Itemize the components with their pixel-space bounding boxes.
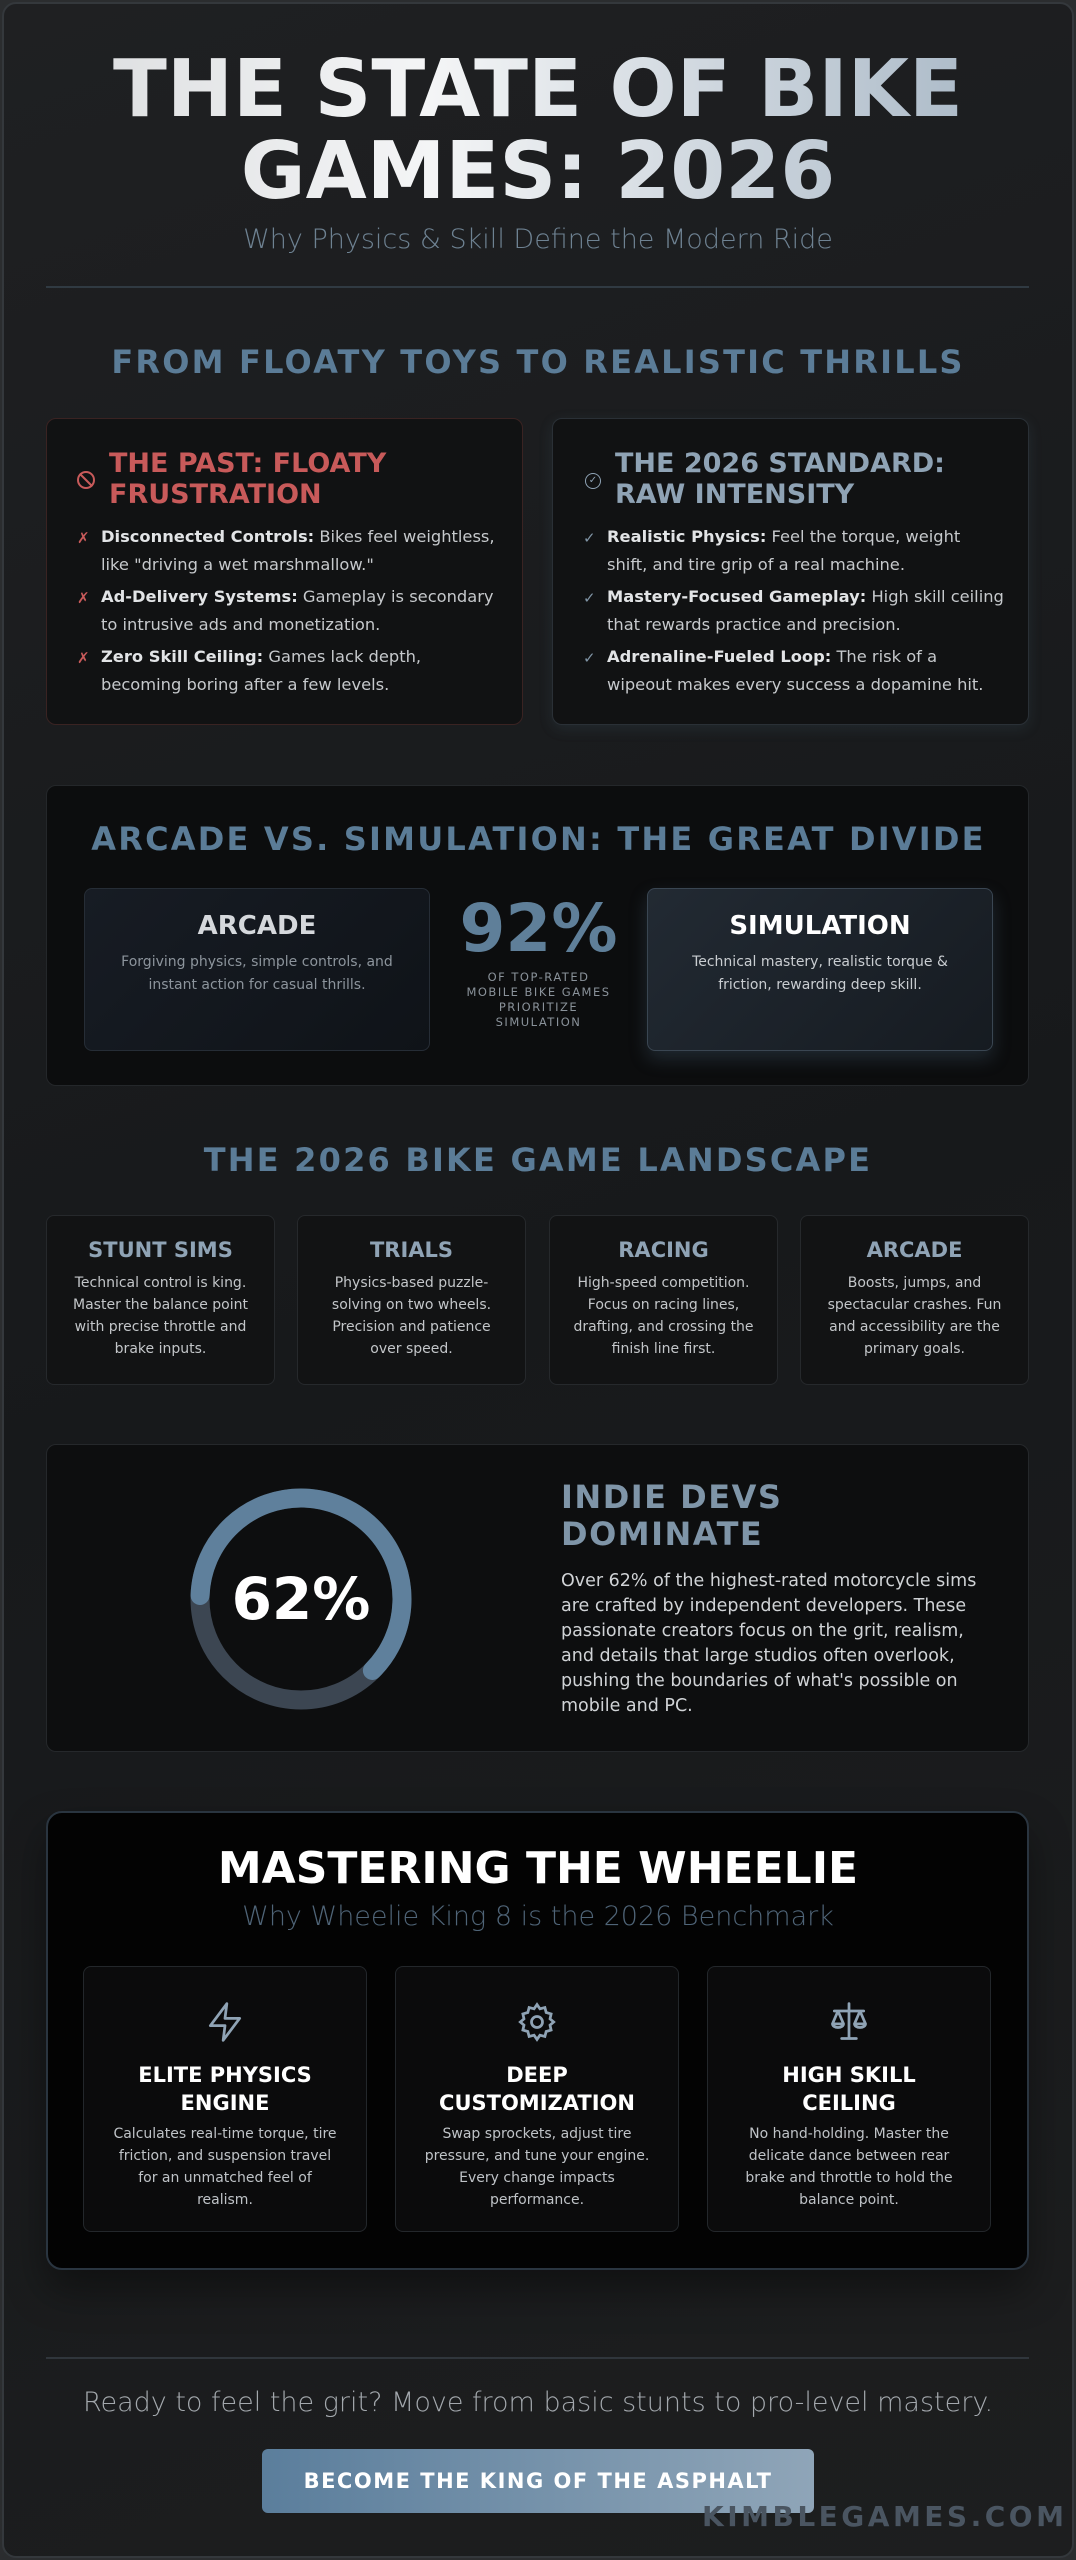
heading: landscape: THE 2026 BIKE GAME LANDSCAPE	[204, 1141, 872, 1179]
list: Ad-Delivery Systems: Gameplay is secondary	[101, 587, 494, 606]
list: becoming boring after a few levels.	[101, 675, 389, 694]
heading: MASTERING THE WHEELIE	[218, 1843, 858, 1894]
panel heading	[615, 448, 945, 510]
subheading: Why Wheelie King 8 is the 2026 Benchmark	[242, 1901, 834, 1932]
box: simulation	[647, 888, 993, 1051]
list: ✓	[583, 529, 596, 547]
box: arcade: Forgiving physics, simple controls, and instant action for casual thrills.	[121, 954, 393, 993]
card: stunt sims: STUNT SIMS	[88, 1238, 233, 1262]
list: Disconnected Controls: Bikes feel weightless,	[101, 527, 495, 546]
heading: ARCADE VS. SIMULATION: THE GREAT DIVIDE	[91, 820, 986, 858]
feature: deep customization: Swap sprockets, adjust tire	[443, 2126, 631, 2142]
feature: high skill ceiling: brake and throttle to hold the	[745, 2170, 953, 2186]
list: Adrenaline-Fueled Loop: The risk of a	[607, 647, 937, 666]
heading: INDIE DEVS	[561, 1478, 782, 1516]
feature: elite physics: friction, and suspension travel	[119, 2148, 331, 2164]
list: Mastery-Focused Gameplay: High skill ceiling	[607, 587, 1004, 606]
feature: deep customization: CUSTOMIZATION	[439, 2091, 635, 2115]
donut chart 62%: 62%	[232, 1565, 370, 1633]
heading	[561, 1478, 782, 1553]
title: GAMES: 2026	[241, 125, 835, 217]
panel: indie devs	[46, 1444, 1029, 1752]
box: simulation: SIMULATION	[729, 911, 911, 941]
card: trials: Physics-based puzzle-solving on two wheels. Precision and patience over speed.	[332, 1275, 491, 1357]
list: that rewards practice and precision.	[607, 615, 901, 634]
stat: 92%: SIMULATION	[496, 1015, 581, 1029]
list: Realistic Physics: Feel the torque, weight	[607, 527, 960, 546]
heading: from floaty toys: FROM FLOATY TOYS TO REALISTIC THRILLS	[111, 343, 965, 381]
icon: check circle	[585, 473, 601, 489]
panel heading: THE 2026 STANDARD:	[615, 448, 945, 479]
card: arcade: Boosts, jumps, and spectacular crashes. Fun and accessibility are the primary goals.	[828, 1275, 1001, 1357]
feature: deep customization: performance.	[490, 2192, 584, 2208]
stat: 92%: OF TOP-RATED	[488, 970, 589, 984]
feature: deep customization: pressure, and tune your engine.	[425, 2148, 649, 2164]
stat: 92%	[460, 890, 617, 1029]
card: stunt sims: Technical control is king. Master the balance point with precise throttle and brake inputs.	[73, 1275, 248, 1357]
feature: high skill ceiling: No hand-holding. Master the	[749, 2126, 949, 2142]
feature: elite physics: Calculates real-time torque, tire	[113, 2126, 337, 2142]
card: arcade: ARCADE	[867, 1238, 962, 1262]
feature: high skill ceiling: CEILING	[802, 2091, 896, 2115]
card: trials	[297, 1215, 526, 1385]
icon: check circle: ✓	[589, 475, 597, 486]
feature: high skill ceiling: HIGH SKILL	[782, 2063, 916, 2087]
watermark: KIMBLEGAMES.COM	[702, 2500, 1067, 2533]
button: BECOME THE KING OF THE ASPHALT	[304, 2469, 772, 2493]
feature: deep customization: Every change impacts	[459, 2170, 615, 2186]
panel heading	[109, 448, 386, 510]
feature: deep customization	[395, 1966, 679, 2232]
list: ✗	[77, 589, 90, 607]
list: shift, and tire grip of a real machine.	[607, 555, 905, 574]
stat: 92%: MOBILE BIKE GAMES	[466, 985, 611, 999]
panel: mastering the wheelie	[46, 1811, 1029, 2270]
icon: gear	[518, 2002, 556, 2042]
panel: arcade vs simulation	[46, 785, 1029, 1086]
title: THE STATE OF BIKE	[113, 43, 963, 135]
icon: lightning	[208, 2002, 242, 2042]
heading: DOMINATE	[561, 1515, 763, 1553]
list	[77, 527, 495, 694]
card: stunt sims	[46, 1215, 275, 1385]
card: arcade	[800, 1215, 1029, 1385]
title	[0, 48, 1076, 212]
feature: elite physics: ENGINE	[181, 2091, 269, 2115]
feature: elite physics	[83, 1966, 367, 2232]
stat: 92%: 92%	[460, 890, 617, 967]
card: racing	[549, 1215, 778, 1385]
card: racing: RACING	[618, 1238, 709, 1262]
icon: scales	[831, 2002, 867, 2040]
stat: 92%: PRIORITIZE	[499, 1000, 578, 1014]
icon: prohibited	[77, 471, 95, 489]
feature: high skill ceiling: balance point.	[799, 2192, 899, 2208]
feature: elite physics: realism.	[197, 2192, 253, 2208]
feature: high skill ceiling: delicate dance between rear	[749, 2148, 949, 2164]
panel: the past	[46, 418, 523, 725]
CTA text: Ready to feel the grit? Move from basic stunts to pro-level mastery.	[83, 2387, 993, 2418]
list: like "driving a wet marshmallow."	[101, 555, 374, 574]
list: ✓	[583, 649, 596, 667]
list: Zero Skill Ceiling: Games lack depth,	[101, 647, 421, 666]
panel heading: FRUSTRATION	[109, 479, 322, 510]
donut chart 62%	[190, 1488, 412, 1710]
paragraph: Over 62% of the highest-rated motorcycle sims are crafted by independent developers. These passionate creators focus on the grit, realism, and details that large studios often overlook, pushing the boundaries of what's possible on mobile and PC.	[561, 1571, 976, 1716]
list: wipeout makes every success a dopamine hit.	[607, 675, 983, 694]
panel: 2026 standard	[552, 418, 1029, 725]
feature: deep customization: DEEP	[506, 2063, 568, 2087]
box: arcade	[84, 888, 430, 1051]
panel heading: THE PAST: FLOATY	[109, 448, 386, 479]
button	[262, 2449, 814, 2513]
subtitle: Why Physics & Skill Define the Modern Ride	[243, 224, 833, 255]
list: ✗	[77, 649, 90, 667]
list	[583, 527, 1004, 694]
list: ✗	[77, 529, 90, 547]
feature: elite physics: ELITE PHYSICS	[138, 2063, 312, 2087]
panel heading: RAW INTENSITY	[615, 479, 854, 510]
feature: high skill ceiling	[707, 1966, 991, 2232]
box: simulation: Technical mastery, realistic torque & friction, rewarding deep skill.	[692, 954, 948, 993]
list: to intrusive ads and monetization.	[101, 615, 380, 634]
box: arcade: ARCADE	[198, 911, 316, 941]
list: ✓	[583, 589, 596, 607]
card: trials: TRIALS	[370, 1238, 453, 1262]
feature: elite physics: for an unmatched feel of	[138, 2170, 312, 2186]
card: racing: High-speed competition. Focus on racing lines, drafting, and crossing the finish line first.	[573, 1275, 754, 1357]
